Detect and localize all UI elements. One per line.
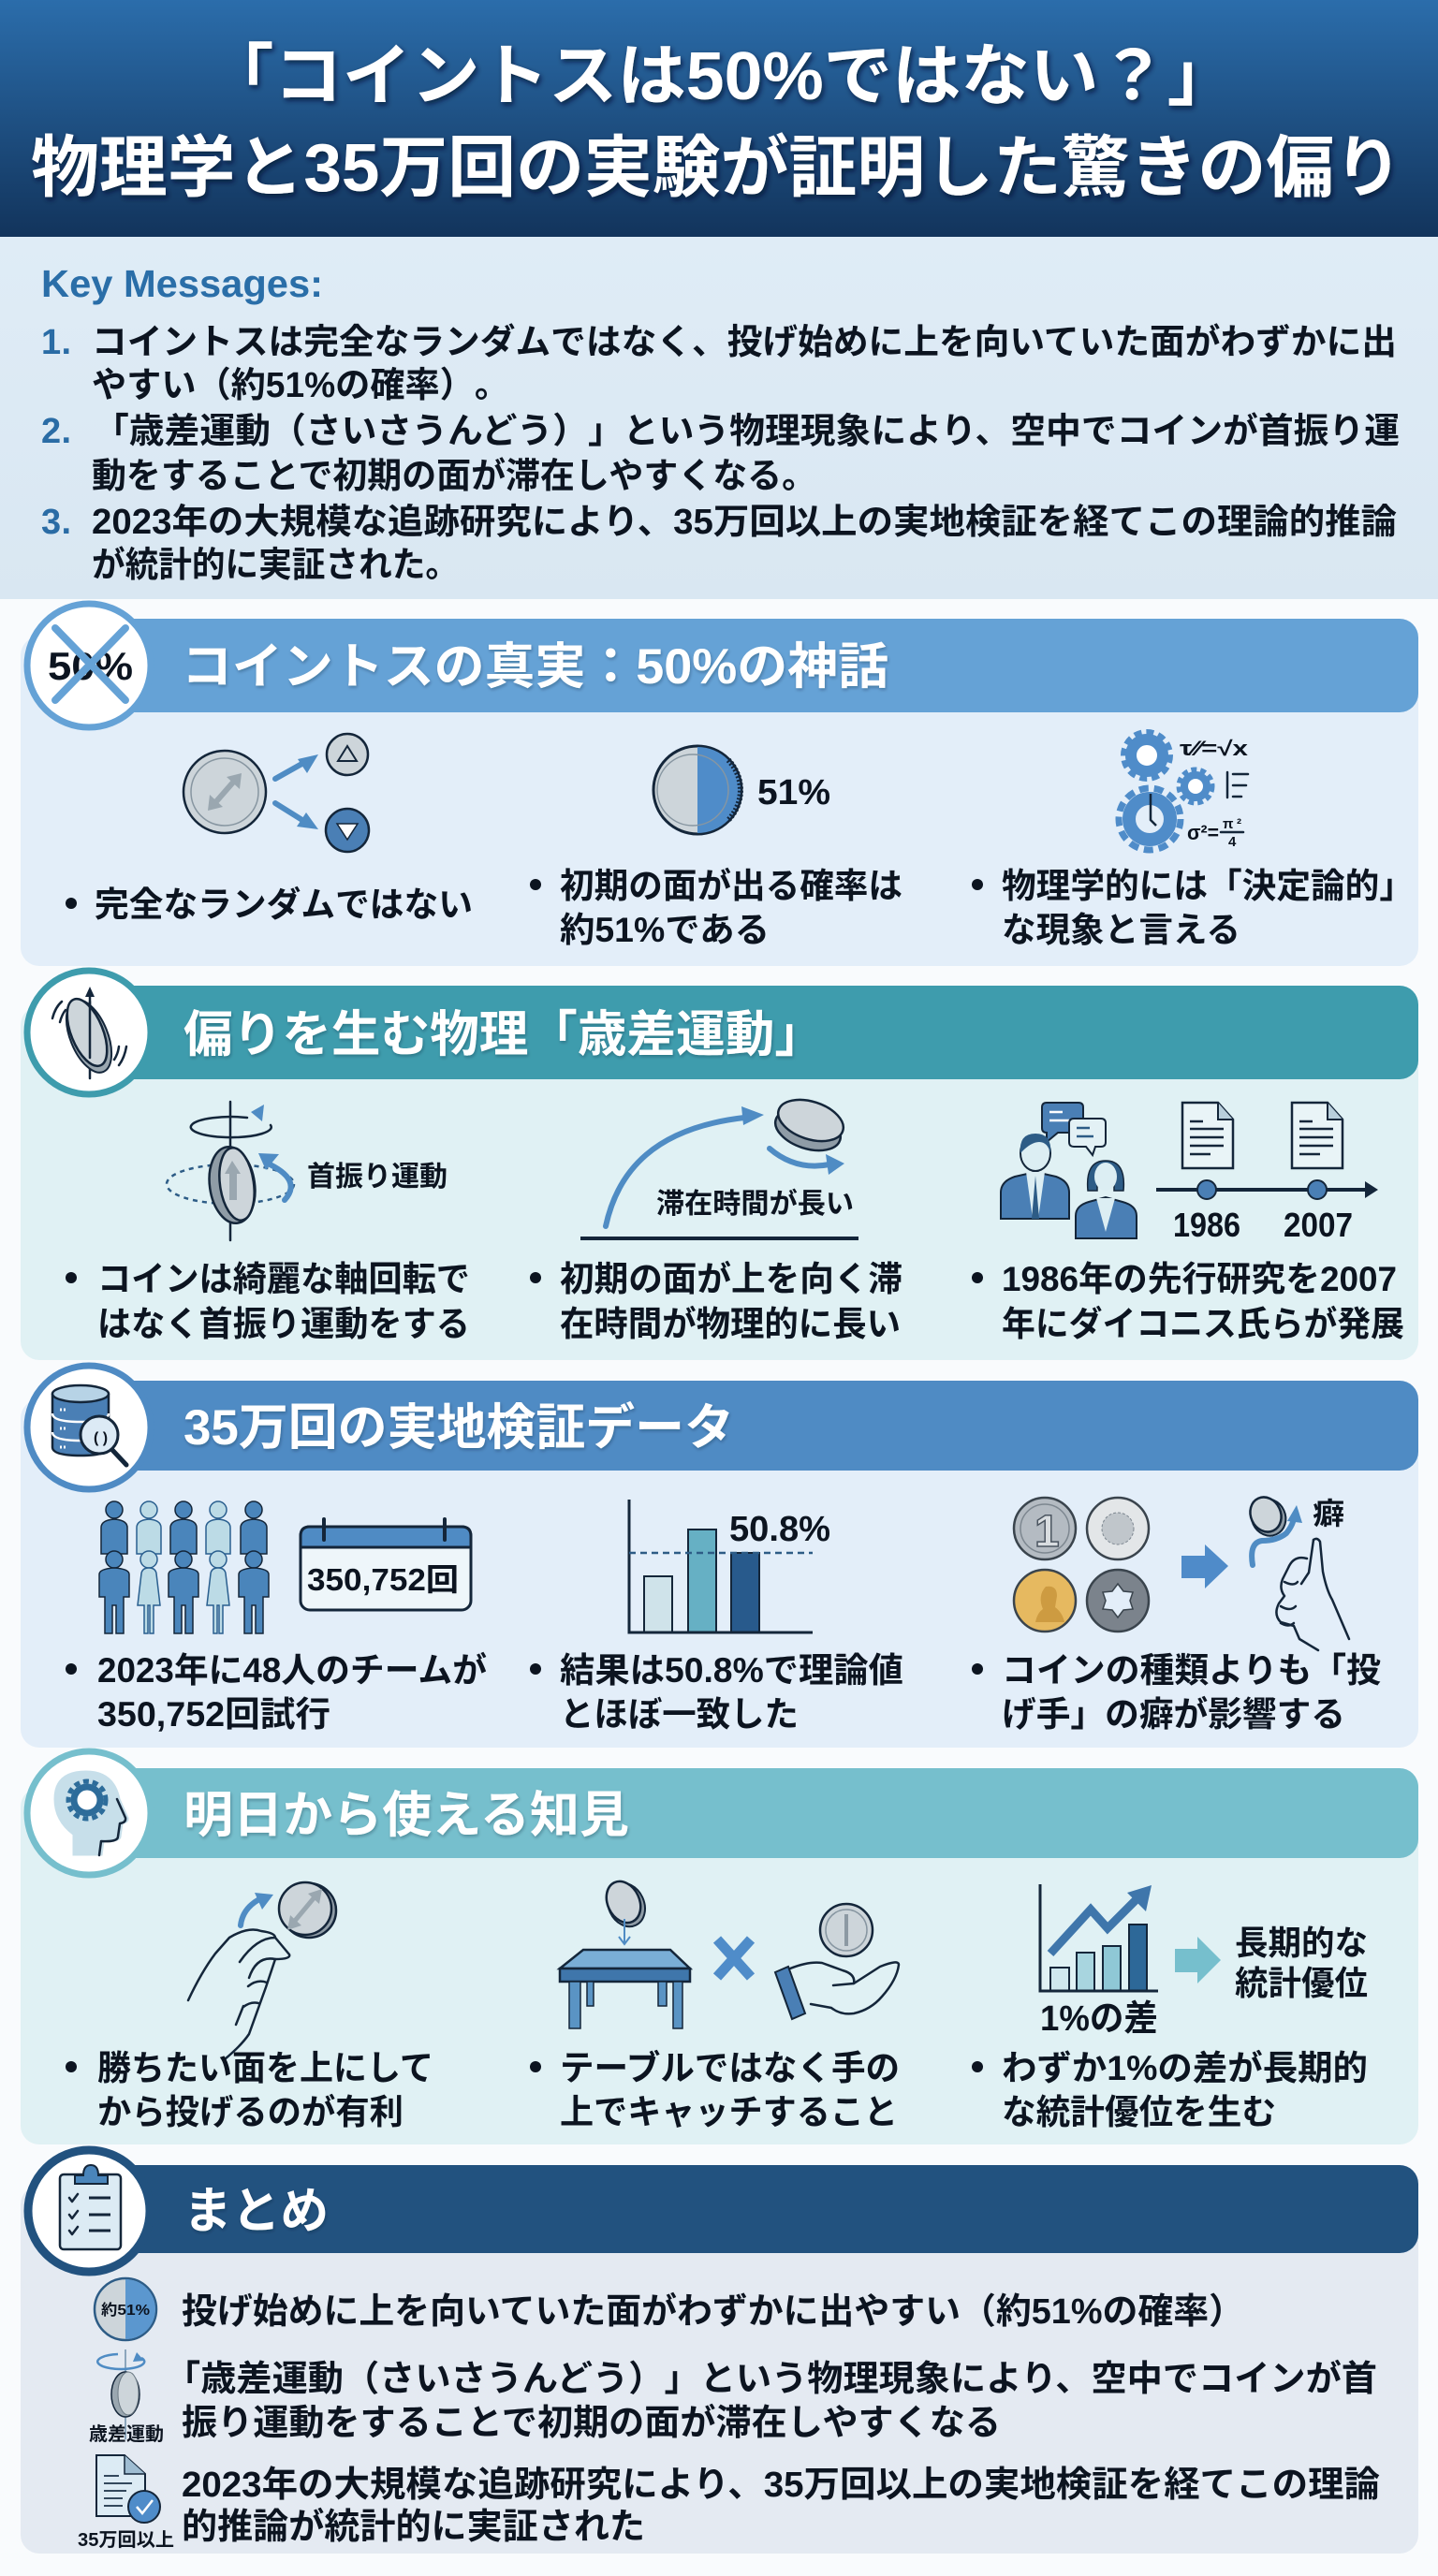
bullet: result matches theory bbox=[530, 1651, 903, 1734]
panel: practical tips bbox=[21, 1751, 1418, 2144]
bullet: start with winning face bbox=[66, 2049, 433, 2131]
bullet: 48 people team bbox=[66, 1651, 487, 1734]
icon: hand with coin on top bbox=[188, 1882, 336, 2059]
icon: four coins bbox=[1014, 1498, 1149, 1632]
bullet: result matches theory: 結果は50.8%で理論値 bbox=[560, 1651, 903, 1690]
icon: half coin 51 percent bbox=[653, 746, 830, 834]
icon: four coins: 1 bbox=[1034, 1507, 1060, 1557]
bar chart: 50.8 percent bbox=[629, 1500, 830, 1632]
icon: cross mark bbox=[717, 1939, 751, 1977]
bar chart: 50.8 percent: 50.8% bbox=[729, 1510, 830, 1549]
icon: clipboard checklist bbox=[28, 2150, 150, 2272]
icon: gears and formulas: π² bbox=[1223, 816, 1241, 832]
key message 3 bbox=[41, 502, 1397, 584]
section bar bbox=[89, 619, 1418, 712]
bullet: dwell time: 在時間が物理的に長い bbox=[560, 1305, 901, 1343]
icon: coin branching to two faces bbox=[183, 734, 369, 852]
bullet: 48 people team: 2023年に48人のチームが bbox=[97, 1651, 487, 1690]
icon: verified document: 35万回以上 bbox=[78, 2529, 174, 2551]
bullet: one percent bbox=[972, 2049, 1368, 2131]
icon: calendar with trial count: 350,752回 bbox=[307, 1562, 459, 1597]
key message 1 bbox=[41, 322, 1397, 404]
bullet: start with winning face: から投げるのが有利 bbox=[97, 2093, 404, 2131]
icon: half coin about 51 percent: 約51% bbox=[101, 2302, 150, 2319]
key message 1: コイントスは完全なランダムではなく、投げ始めに上を向いていた面がわずかに出 bbox=[92, 322, 1397, 361]
title: 「コイントスは50%ではない？」 bbox=[205, 39, 1236, 114]
icon: precession coin: 首振り運動 bbox=[307, 1162, 448, 1193]
arrow: coins to thrower bbox=[1181, 1544, 1228, 1588]
icon: precession bbox=[89, 2349, 164, 2445]
icon: database and magnifier: ( ) bbox=[94, 1430, 108, 1446]
section bar bbox=[89, 2165, 1418, 2253]
icon: table catch crossed bbox=[560, 1876, 690, 2028]
callout: long-term statistical edge: 長期的な bbox=[1235, 1924, 1368, 1962]
icon: coin flight arc bbox=[580, 1092, 858, 1238]
section heading: 明日から使える知見 bbox=[183, 1788, 629, 1843]
key message 2 bbox=[41, 411, 1400, 495]
title: 物理学と35万回の実験が証明した驚きの偏り bbox=[31, 131, 1402, 206]
key message 2: 2. bbox=[41, 412, 71, 451]
key messages heading: Key Messages: bbox=[41, 262, 323, 305]
icon: half coin 51 percent: 51% bbox=[757, 773, 830, 812]
icon: precession coin bbox=[167, 1102, 448, 1240]
icon: thrower habit: 癖 bbox=[1313, 1497, 1344, 1530]
bullet: deterministic bbox=[972, 867, 1414, 949]
arrow: to long-term edge bbox=[1175, 1937, 1221, 1983]
bullet: deterministic: な現象と言える bbox=[1002, 911, 1240, 949]
icon: gears and formulas: σ²= bbox=[1187, 821, 1219, 844]
bullet: thrower matters: げ手」の癖が影響する bbox=[1002, 1695, 1345, 1734]
icon: researchers and timeline bbox=[1001, 1103, 1378, 1244]
bullet: one percent: な統計優位を生む bbox=[1002, 2093, 1276, 2131]
bullet: wobble bbox=[66, 1260, 470, 1343]
summary line 2: 「歳差運動（さいさうんどう）」という物理現象により、空中でコインが首 bbox=[165, 2360, 1377, 2399]
bullet: not random: 完全なランダムではない bbox=[95, 886, 473, 924]
bullet: start with winning face: 勝ちたい面を上にして bbox=[97, 2049, 433, 2087]
section heading: コイントスの真実：50%の神話 bbox=[182, 639, 888, 695]
icon: researchers and timeline: 1986 bbox=[1173, 1206, 1240, 1244]
icon: coin on open hand bbox=[775, 1904, 899, 2019]
icon: coin flight arc: 滞在時間が長い bbox=[656, 1188, 854, 1220]
panel: key messages bbox=[0, 237, 1438, 599]
summary line 2 bbox=[165, 2360, 1377, 2443]
icon: calendar with trial count bbox=[301, 1519, 471, 1610]
chart: rising trend bbox=[1040, 1884, 1158, 2039]
summary line 2: 振り運動をすることで初期の面が滞在しやすくなる bbox=[182, 2404, 1001, 2443]
section heading: 35万回の実地検証データ bbox=[183, 1400, 734, 1456]
bullet: 51 percent: 約51%である bbox=[560, 911, 770, 949]
icon: tilted coin with axis bbox=[27, 971, 151, 1094]
key message 1: 1. bbox=[41, 323, 71, 362]
section heading: 偏りを生む物理「歳差運動」 bbox=[183, 1007, 824, 1062]
bullet: thrower matters bbox=[972, 1651, 1381, 1734]
bullet: research history bbox=[972, 1260, 1404, 1343]
icon: team of people bbox=[99, 1501, 269, 1633]
section bar bbox=[89, 1381, 1418, 1471]
key message 3: 3. bbox=[41, 503, 71, 542]
section bar bbox=[89, 1768, 1418, 1858]
icon: researchers and timeline: 2007 bbox=[1284, 1206, 1353, 1244]
icon: gears and formulas: τ⁄⁄=√x bbox=[1180, 737, 1249, 760]
summary line 1: 投げ始めに上を向いていた面がわずかに出やすい（約51%の確率） bbox=[182, 2292, 1244, 2332]
bullet: catch in hand: テーブルではなく手の bbox=[560, 2049, 900, 2087]
panel: 350 thousand trials data bbox=[21, 1366, 1418, 1748]
icon: gears and formulas bbox=[1119, 732, 1249, 850]
icon: database and magnifier bbox=[27, 1366, 151, 1489]
bullet: dwell time: 初期の面が上を向く滞 bbox=[560, 1260, 902, 1298]
summary line 3: 的推論が統計的に実証された bbox=[182, 2508, 645, 2547]
section heading: まとめ bbox=[183, 2184, 329, 2239]
bullet: research history: 年にダイコニス氏らが発展 bbox=[1002, 1305, 1404, 1343]
callout: long-term statistical edge bbox=[1235, 1924, 1368, 2002]
bullet: research history: 1986年の先行研究を2007 bbox=[1002, 1260, 1397, 1298]
summary line 3 bbox=[182, 2466, 1380, 2547]
icon: half coin about 51 percent bbox=[95, 2278, 156, 2340]
icon: head with gear bbox=[27, 1751, 151, 1875]
bullet: one percent: わずか1%の差が長期的 bbox=[1002, 2049, 1368, 2087]
panel: precession physics bbox=[21, 971, 1418, 1360]
bullet: result matches theory: とほぼ一致した bbox=[560, 1695, 799, 1734]
bullet: catch in hand: 上でキャッチすること bbox=[560, 2093, 898, 2131]
key message 1: やすい（約51%の確率）。 bbox=[92, 365, 509, 404]
icon: gears and formulas: 4 bbox=[1228, 834, 1237, 850]
icon: verified document bbox=[78, 2455, 174, 2551]
title bbox=[31, 39, 1402, 206]
icon: crossed 50 percent bbox=[27, 604, 151, 727]
panel: coin toss truth bbox=[21, 604, 1418, 966]
section bar bbox=[89, 986, 1418, 1079]
panel: summary bbox=[21, 2150, 1418, 2554]
callout: long-term statistical edge: 統計優位 bbox=[1235, 1964, 1368, 2002]
bullet: catch in hand bbox=[530, 2049, 900, 2131]
icon: crossed 50 percent: 50% bbox=[48, 644, 133, 688]
bullet: 51 percent: 初期の面が出る確率は bbox=[560, 867, 902, 905]
bullet: 51 percent bbox=[530, 867, 902, 949]
header band bbox=[0, 0, 1438, 237]
summary line 3: 2023年の大規模な追跡研究により、35万回以上の実地検証を経てこの理論 bbox=[182, 2466, 1380, 2505]
bullet: deterministic: 物理学的には「決定論的」 bbox=[1002, 867, 1414, 905]
bullet: thrower matters: コインの種類よりも「投 bbox=[1002, 1651, 1381, 1690]
chart: rising trend: 1%の差 bbox=[1040, 1999, 1158, 2039]
key message 3: が統計的に実証された。 bbox=[92, 545, 459, 584]
bullet: 48 people team: 350,752回試行 bbox=[97, 1695, 330, 1734]
bullet: dwell time bbox=[530, 1260, 902, 1343]
key message 3: 2023年の大規模な追跡研究により、35万回以上の実地検証を経てこの理論的推論 bbox=[92, 502, 1397, 541]
icon: thrower habit bbox=[1244, 1492, 1349, 1650]
key message 2: 動をすることで初期の面が滞在しやすくなる。 bbox=[92, 456, 816, 495]
key message 2: 「歳差運動（さいさうんどう）」という物理現象により、空中でコインが首振り運 bbox=[94, 411, 1400, 450]
bullet: wobble: コインは綺麗な軸回転で bbox=[97, 1260, 470, 1298]
icon: precession: 歳差運動 bbox=[89, 2423, 164, 2445]
bullet: wobble: はなく首振り運動をする bbox=[97, 1305, 470, 1343]
